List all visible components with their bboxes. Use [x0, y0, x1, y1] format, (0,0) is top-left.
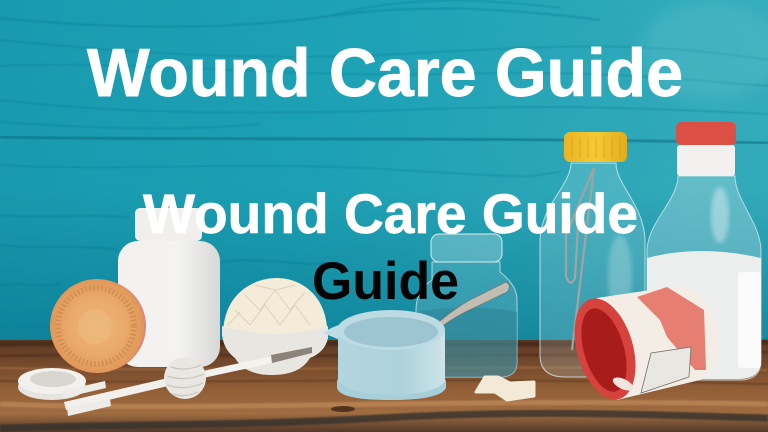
light blue measuring cup — [323, 310, 446, 400]
string knot — [611, 375, 635, 393]
white applicator stick with ribbed ball — [62, 347, 312, 416]
star shaped white piece — [476, 377, 534, 400]
spoon — [432, 282, 509, 328]
wooden table — [0, 340, 768, 432]
second white title: Wound Care Guide — [143, 182, 638, 245]
product label — [641, 347, 691, 393]
white medicine bottle — [118, 208, 220, 367]
yellow cap — [564, 132, 627, 162]
textured gauze ball in white bowl — [222, 278, 328, 375]
orange round disc — [50, 279, 146, 373]
tipped red and white container — [564, 285, 720, 407]
bottle liquid and label — [647, 251, 761, 379]
red cap — [676, 122, 736, 145]
white ring — [18, 368, 86, 400]
black subtitle: Guide — [312, 252, 459, 311]
main title: Wound Care Guide — [87, 35, 683, 111]
metal clip — [566, 168, 594, 350]
white collar — [677, 145, 735, 176]
large clear bottle with red cap — [647, 122, 761, 380]
background: teal wooden wall — [0, 0, 768, 345]
clear bottle with yellow cap — [540, 132, 645, 377]
glass jar with liquid — [416, 234, 517, 377]
red paint patch — [637, 287, 706, 370]
red open end — [564, 291, 646, 407]
